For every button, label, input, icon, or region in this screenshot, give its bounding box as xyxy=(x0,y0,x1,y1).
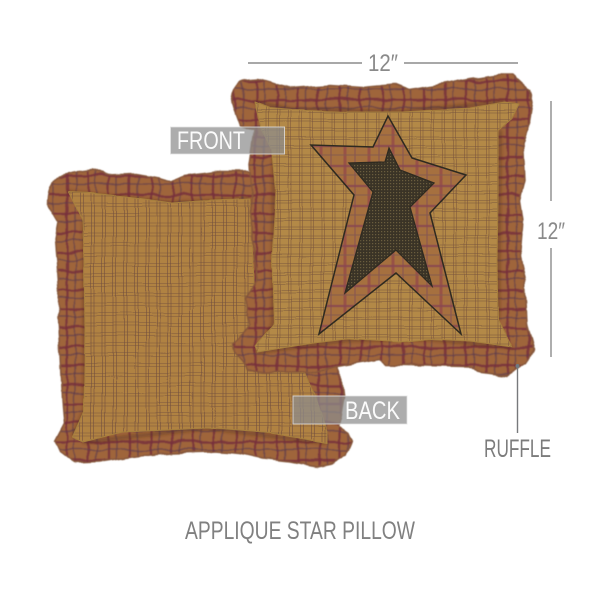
back label box xyxy=(293,396,407,424)
back label text: BACK xyxy=(345,397,400,425)
back pillow shadow edge xyxy=(68,192,327,443)
width dimension line xyxy=(248,62,518,64)
front label text: FRONT xyxy=(177,127,245,155)
ruffle label: RUFFLE xyxy=(484,435,551,463)
front pillow ruffle xyxy=(232,75,534,376)
ruffle leader line xyxy=(516,366,518,433)
height dimension line xyxy=(550,101,552,357)
back label xyxy=(293,396,407,425)
product title: APPLIQUE STAR PILLOW xyxy=(185,517,415,545)
back pillow body xyxy=(68,192,327,443)
height label: 12″ xyxy=(537,218,565,245)
ruffle callout xyxy=(484,364,551,463)
back pillow xyxy=(48,170,352,467)
ruffle leader dot xyxy=(516,364,520,368)
outer star xyxy=(311,116,466,334)
inner star xyxy=(345,148,434,293)
front label box xyxy=(170,127,284,154)
back pillow ruffle xyxy=(48,170,352,467)
front pillow xyxy=(232,75,534,376)
front pillow body xyxy=(255,102,519,352)
front label xyxy=(170,127,284,155)
width label: 12″ xyxy=(368,50,398,77)
front pillow shadow edge xyxy=(255,102,512,352)
